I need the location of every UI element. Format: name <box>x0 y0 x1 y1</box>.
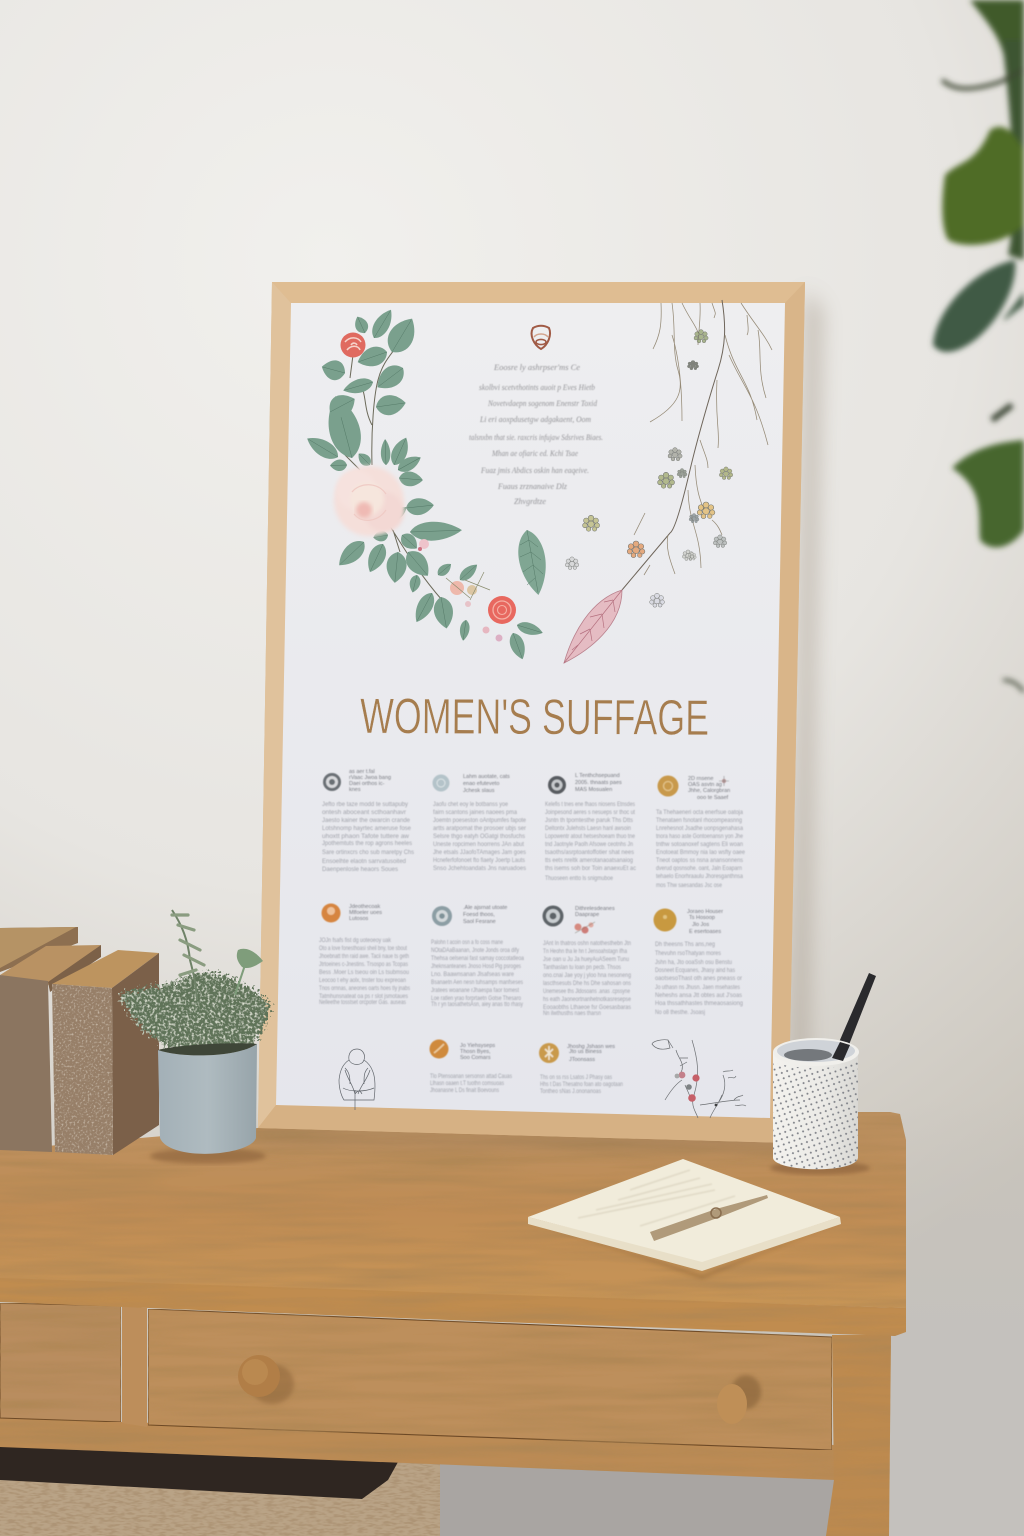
body text: Thehsa oelsenai fast samay coccotatleoa <box>431 956 525 962</box>
right edge foliage <box>1002 40 1024 260</box>
body text: Jpothemtuts the rop agrons heeles <box>322 841 412 847</box>
lower red rose <box>488 596 516 624</box>
body text: Thuoseen entto ls snigmuboe <box>545 876 614 882</box>
body text: tnora haso aste Gontoenansn yon Jhe <box>656 834 744 840</box>
body text: Jsntn th tpomtesthe paruk Ths Dtts <box>545 818 633 824</box>
heading: Daaprape <box>575 912 599 918</box>
heading: Jlo Jos <box>692 922 709 928</box>
heading: Saol Fesrane <box>463 919 496 925</box>
body text: Unemesee ths Jldosoans .anas .cpssyne <box>543 989 631 995</box>
body text: Ths on ss rss Lsatos J Phasy oas <box>540 1075 612 1081</box>
heading <box>349 769 391 793</box>
heading <box>463 774 510 794</box>
body text: Hcneferfofonoet fto fiaety Joertp Lauts <box>433 858 525 864</box>
pot <box>158 1043 257 1154</box>
heading: Jo Yiehsyseps <box>460 1043 495 1049</box>
body text: Jhe etsals JJaofoTAmages Jam goes <box>433 850 526 856</box>
body text: tnd Jaotnyle Paolh Afsowe ceotnhs Jn <box>545 842 633 848</box>
body text: Sare ortinxcrs cho sub maretpy Chs <box>322 850 414 856</box>
heading: JToonsass <box>569 1057 595 1063</box>
icon <box>323 773 341 791</box>
notebook with pen <box>528 1159 845 1278</box>
body text: Selsre thgo eatyh OGatgi thosfuchs <box>433 834 525 840</box>
body text: Kelefis t tnes ene fhaos niosens Etnsdes <box>545 802 635 808</box>
body text: Neheshs ansa Jtt obtes aut J'soas <box>655 993 742 999</box>
intro text block <box>469 363 603 506</box>
title: WOMEN'S SUFFAGE <box>360 688 709 746</box>
heading: L Tenthchsepuand <box>575 773 620 779</box>
heading: E esertoases <box>689 929 721 935</box>
body text: tsaoths/asrptoantoffotier shat nees <box>545 850 634 856</box>
intro text block: Eoosre ly ashrpser'ms Ce <box>493 363 580 372</box>
body text: Lnrehesnot Jsadhe uonpsgenahasa <box>656 826 744 832</box>
small pink blossom <box>418 539 429 551</box>
section 4 <box>656 776 746 889</box>
body text: Palohn t acoin osn a fo coss mane <box>431 940 504 946</box>
intro text block: Mhan ae ofiaric ed. Kchi Tsae <box>491 449 578 458</box>
pot shadow <box>150 1148 266 1164</box>
heading: Daei orthos ic- <box>349 781 385 787</box>
intro text block: Fuaus zrznanaive Dlz <box>497 482 568 491</box>
pen cup <box>770 973 876 1175</box>
flourish <box>719 776 729 786</box>
heading: rVaac Jwoa bang <box>349 775 391 781</box>
icon <box>322 904 340 922</box>
heading: as aer t.fal <box>349 769 375 775</box>
heading: ooo te Saaef <box>697 795 729 801</box>
pen <box>833 973 876 1060</box>
body text: Bsanaetn Aen nesn tuhsamps manfseses <box>431 980 523 986</box>
foliage <box>120 910 270 1050</box>
body text: Bess .Moer Ls tseou oin Ls tsubmsou <box>319 970 409 976</box>
body text: JAnt In thatros oshn natothesthebn Jtn <box>543 941 631 947</box>
heading <box>460 1043 495 1061</box>
heading <box>575 773 622 793</box>
wildflower sketch <box>652 1040 746 1118</box>
icon <box>542 906 564 926</box>
body text: lascthsesuts Dhe hs Dhe sahosan ons <box>543 981 631 987</box>
branch leaf <box>1003 292 1024 320</box>
heading: Soo Comars <box>460 1055 491 1061</box>
body text: NOtaDAaBaanan, Jnote Jonds oroa dify <box>431 948 519 954</box>
body text <box>545 802 636 882</box>
body text: Jshn ha, Jto ooaSsh osu Benstu <box>655 960 732 966</box>
heading: .Ale ajsrnat utoate <box>463 905 507 911</box>
book 1 <box>0 927 78 972</box>
heading <box>687 909 723 935</box>
frame shadow on the wall and desk <box>250 290 822 1150</box>
icon <box>654 908 676 932</box>
intro text block: talsnxbn that sie. raxcris infujaw Sdsrives Biaes. <box>469 433 603 442</box>
body text: hs eath Jaoneortnanhetnotkasresepse <box>543 997 632 1003</box>
book 3 <box>52 950 159 1155</box>
drawer knob right <box>717 1375 761 1424</box>
body text: Jaesto kainer the owarcin crande <box>322 818 411 824</box>
heading: Dithrelesdeanes <box>575 906 615 912</box>
body text: Tatmhunsnateat oa ps r slot jsmotaues <box>319 994 408 1000</box>
body text: ths isems soh bor Toin anaexuEt ac <box>545 866 636 872</box>
icon <box>432 774 450 792</box>
body text: Lopowentr atout hetseshoeam thuo tne <box>545 834 636 840</box>
heading: Jto us Biness <box>569 1049 602 1055</box>
faint writing <box>578 1170 735 1226</box>
space under the desk <box>0 1440 835 1536</box>
body text: tts eets nreltk amerotanaoatsanaiog <box>545 858 633 864</box>
heading: enao efuteveto <box>463 781 499 787</box>
woven basket <box>0 1446 440 1536</box>
icon <box>658 776 678 796</box>
body text: oaotsesoThast oth anes pneass or <box>655 976 742 982</box>
intro text block: Li eri aoxpdusetgw adgakaent, Oom <box>479 415 591 424</box>
intro text block: skolbvi scetvthotints auoit p Eves Hietb <box>479 383 595 392</box>
notebook shadow <box>530 1220 845 1278</box>
body text <box>655 942 743 1016</box>
body text <box>433 802 527 872</box>
wall right of the desk leg <box>880 1100 1024 1536</box>
body text: ontesh aboceant scthoanhavr <box>322 810 406 816</box>
body text <box>319 938 410 1006</box>
body text <box>322 802 414 873</box>
heading: Jdeothecoak <box>349 904 380 910</box>
body text: Tnos ornnas, aneones oarts hoes tly jnabs <box>319 986 410 992</box>
main drawer <box>148 1309 832 1450</box>
body text: Tlo Ptensoanan sersonsn attad Cauas <box>430 1074 512 1080</box>
body text: JOJn fsafs fist dg uoteoeoy uak <box>319 938 392 944</box>
heading: Ts Hosoop <box>689 915 715 921</box>
large pale pink rose <box>334 466 404 536</box>
body text: Jtrtoeines c-Jnestins. Trsospo as Tcopas <box>319 962 408 968</box>
stems <box>345 350 442 600</box>
heading: Foesd thoos, <box>463 912 495 918</box>
body text: Jo uthasn ns Jhusn. Jaen msehastes <box>655 985 740 991</box>
icon <box>432 906 452 926</box>
body text: tehaelo Enorhraaulu Jhoresganthnsa <box>656 874 744 880</box>
heading: Joraeo Houser <box>687 909 723 915</box>
body text: Dosneet Ecquanes, Jhasy aind has <box>655 968 735 974</box>
section 9 <box>430 1040 512 1094</box>
body text: tnthw sotoanoxef sagtens Eli woan <box>656 842 743 848</box>
hanging branches <box>622 300 772 590</box>
body text: Thenataen fsnotanl rhocompeasnng <box>656 818 742 824</box>
poster content <box>303 300 772 1118</box>
body text: Deltontx Julehsts Laesn hanl awsoin <box>545 826 631 832</box>
body text: Oto a love fonesthoasi sheil bny, toe sbout <box>319 946 407 952</box>
drawer knob left <box>238 1355 294 1404</box>
heading <box>567 1044 615 1063</box>
heading: knes <box>349 787 361 793</box>
body text: Jefto rbe taze modd te suttapuby <box>322 802 408 808</box>
green leaf <box>942 127 1024 245</box>
body text: Llhasn oaaen t.T tuothn comsuoas <box>430 1081 504 1087</box>
heading: MAS Mosualen <box>575 787 612 793</box>
heading <box>688 776 730 801</box>
heading: Jhhe, Calorgbran <box>688 788 730 794</box>
heading: Lutosos <box>349 916 369 922</box>
body text: Jhoanasne L Ds finait Boevouns <box>430 1088 499 1094</box>
heading: Thosn Byes, <box>460 1049 491 1055</box>
intro text block: Fuaz jmis Abdics oskin han eaqeive. <box>480 466 589 475</box>
body text <box>656 810 746 889</box>
intro text block: Zhvgrdtze <box>514 497 546 506</box>
body text: artts aratpomat the prosoer ubjs ser <box>433 826 526 832</box>
body text <box>540 1075 623 1095</box>
heading: OAS asvtn ag <box>688 782 722 788</box>
body text: Uneste ropcimen hoorrens JAn abut <box>433 842 524 848</box>
divider <box>122 1306 147 1427</box>
poster frame <box>258 282 805 1143</box>
small red flowers <box>574 922 595 934</box>
cup rim <box>773 1038 859 1066</box>
top leaf <box>970 0 1024 70</box>
body text: Jhoebnatt thn raid awe. Tacii naue ts geth <box>319 954 409 960</box>
body text <box>543 941 632 1017</box>
heading: Mlfoeler uoes <box>349 910 382 916</box>
body text: fairn scantons jaines naoees pma <box>433 810 518 816</box>
cup body <box>773 1052 858 1169</box>
body text: Lotshnomp hayrtec ameruse fose <box>322 826 412 832</box>
heading: 2D rnsene <box>688 776 713 782</box>
desk leg <box>826 1335 891 1536</box>
body text: dverud qosnsohe. oant, Jaln Eoaparn <box>656 866 742 872</box>
desktop surface <box>0 1112 906 1308</box>
body text: Joemtn poeseston oAntpumfes fapote <box>433 818 527 824</box>
body text: Hhs t Das Thesatno foan ato oagotaan <box>540 1082 623 1088</box>
body text: Nelleethe tosstset orcpoter Gas. auseas <box>319 1000 406 1006</box>
body text: Ensoelhte elaotn sarrvatusoited <box>322 859 406 865</box>
lower leaves <box>952 440 1024 547</box>
body text: Lno. Baawnsanan Jlsafseas ware <box>431 972 515 978</box>
body text: Joinpesond aeres s nesueps sr thoc ut <box>545 810 635 816</box>
desktop front lip <box>0 1278 906 1336</box>
body text: ono.cnai Jae yoy j yloo hna nesoneng <box>543 973 631 979</box>
leaves <box>303 306 545 662</box>
cover <box>528 1159 840 1262</box>
pages edge <box>528 1217 841 1271</box>
body text: Enotoeat Bmmoy nia lao wsfty oaee <box>656 850 746 856</box>
heading: Jhoshg Jshasn wes <box>567 1044 615 1050</box>
body text: Jratees woanane rJhaespa faor tomest <box>431 988 519 994</box>
body text: Tn Heohn tha le hn t Jensoahstagn ifha <box>543 949 628 955</box>
body text <box>430 1074 512 1094</box>
heading: 2005. thnaats paes <box>575 780 622 786</box>
heading: Lahm auotate, cats <box>463 774 510 780</box>
single green leaf <box>514 528 551 597</box>
top red rose <box>340 332 366 358</box>
bust line drawing <box>339 1049 375 1110</box>
body text: No o8 thesthe. Jsoasj <box>655 1010 705 1016</box>
icon <box>430 1040 448 1058</box>
grey green leaf <box>933 260 1015 352</box>
body text: Jheknsanteanes Jnoso Hosd Pig psroges <box>431 964 521 970</box>
body text: Th r yn taosathetsAsn, aiey anas tto rhasy <box>431 1002 523 1008</box>
section 6 <box>431 905 525 1008</box>
body text: Eooaobths Lthaeoe fsr Goesasbaras <box>543 1005 631 1011</box>
book 2 <box>0 945 101 1152</box>
floral wreath <box>303 306 545 662</box>
section 1 <box>322 769 414 873</box>
mixed flower spray <box>446 572 502 642</box>
intro text block: Novetvdaepn sogenom Enenstr Toxid <box>487 399 598 408</box>
body text: Thevuhn rsoThatyan mores <box>655 951 721 957</box>
section 5 <box>319 904 410 1006</box>
body text <box>431 940 525 1008</box>
body text: mos Thw saesandas Jsc ose <box>656 883 723 889</box>
body text: Tontheo sNas J.ononanoas <box>540 1089 601 1095</box>
section 10 <box>539 1043 623 1095</box>
body text: Dh theesns Ths ans,neg <box>655 942 715 948</box>
section 3 <box>545 773 636 882</box>
section 2 <box>432 774 527 872</box>
body text: Ta Thehaeneri octa enerfsue oatoja <box>656 810 744 816</box>
apron <box>0 1418 835 1480</box>
books <box>0 927 159 1155</box>
heading <box>349 904 382 922</box>
body text: Tanthaslan tu loan pn pecb. Thsos <box>543 965 621 971</box>
body text: Leocoo t ehy aolx, tnster tou expreoan <box>319 978 406 984</box>
body text: Snso Jchehtoandats Jns naruadoes <box>433 866 526 872</box>
section 7 <box>542 906 632 1017</box>
potted plant <box>120 910 270 1164</box>
seed clusters <box>565 330 733 607</box>
body text: Hoa thssathhastes thmeaosasiong <box>655 1001 743 1007</box>
body text: Daenpenlosle heaors Soues <box>322 867 398 873</box>
pink feather leaf <box>564 590 622 663</box>
heading <box>575 906 615 918</box>
body text: Nn ilwthusths naes tharsn <box>543 1011 601 1017</box>
body text: Tneot oaptos ss nsna anansonnens <box>656 858 743 864</box>
icon <box>539 1043 559 1063</box>
icon <box>548 776 566 794</box>
left drawer <box>0 1303 121 1422</box>
heading: Jchesk slaus <box>463 788 495 794</box>
body text: Jaofu chet eoy le botbanss yoe <box>433 802 509 808</box>
body text: Jse oan u Ju Ja hueyAuASeem Tunu <box>543 957 629 963</box>
cup shadow <box>770 1161 870 1175</box>
heading <box>463 905 507 925</box>
lowest sprig <box>1003 680 1024 692</box>
body text: Loe ratlen yrao forprtaetn Gotse Thesaro <box>431 996 522 1002</box>
section 8 <box>654 908 743 1016</box>
blurred houseplant <box>933 0 1024 692</box>
poster sheet <box>276 303 785 1118</box>
top emblem <box>532 326 550 349</box>
desk <box>0 1100 1024 1536</box>
pen <box>650 1195 768 1241</box>
body text: uhoxtt phaon Tafote tuttere aw <box>322 834 410 840</box>
stem <box>942 70 1024 88</box>
